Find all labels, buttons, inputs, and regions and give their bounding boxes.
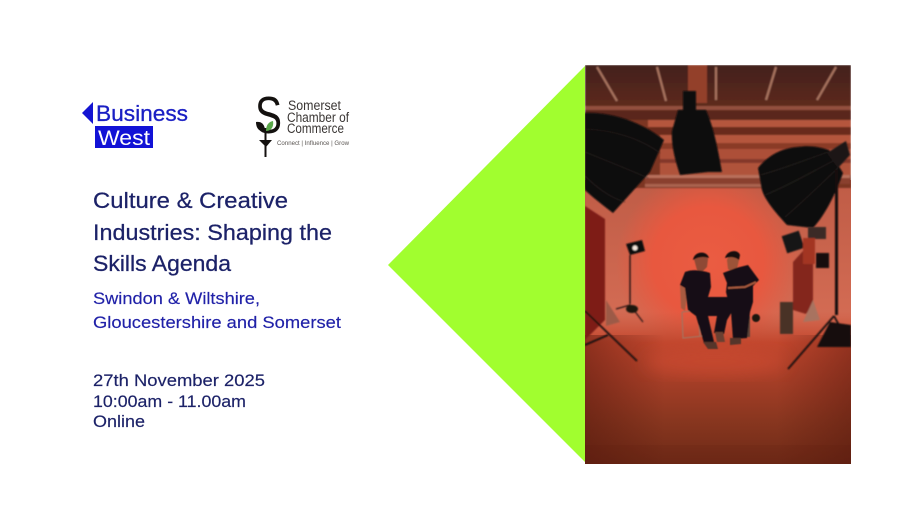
left panel and reflector — [585, 206, 637, 361]
subtitle: regions: Swindon & Wiltshire, — [93, 289, 260, 308]
right panel and case — [780, 227, 829, 334]
title: Industries: Shaping the — [93, 220, 332, 245]
organisation name — [287, 98, 349, 136]
organisation name: Commerce — [287, 121, 344, 136]
studio wall and floor — [585, 170, 851, 464]
event details: Online — [93, 412, 145, 431]
person left — [694, 257, 708, 271]
logo: Business West — [82, 101, 188, 150]
floor shading edge — [585, 445, 851, 464]
arrow mark — [82, 102, 93, 124]
softbox centre — [672, 91, 722, 175]
organisation name: Chamber of — [287, 110, 349, 125]
title — [93, 188, 332, 276]
event details: 10:00am - 11.00am — [93, 392, 246, 411]
event banner — [82, 65, 851, 464]
chair and stool — [682, 310, 703, 338]
wordmark Business: Business — [96, 101, 188, 126]
softbox right and stand — [758, 141, 851, 369]
S plant mark: S — [255, 87, 282, 145]
title: Skills Agenda — [93, 251, 231, 276]
title: Culture & Creative — [93, 188, 288, 213]
wordmark West: West — [98, 126, 150, 150]
green triangle — [388, 66, 585, 462]
photo: film studio with two people — [585, 65, 851, 464]
small spot light — [616, 240, 645, 322]
person right — [727, 256, 739, 272]
ceiling beams — [585, 65, 851, 188]
event details — [93, 371, 265, 431]
event details: 27th November 2025 — [93, 371, 265, 390]
two seated people — [680, 251, 760, 349]
softbox left — [585, 113, 664, 213]
strapline: Connect | Influence | Grow — [277, 141, 350, 147]
subtitle: regions — [93, 289, 341, 332]
subtitle: regions: Gloucestershire and Somerset — [93, 313, 341, 332]
logo: Somerset Chamber of Commerce — [255, 87, 350, 157]
organisation name: Somerset — [288, 98, 341, 113]
